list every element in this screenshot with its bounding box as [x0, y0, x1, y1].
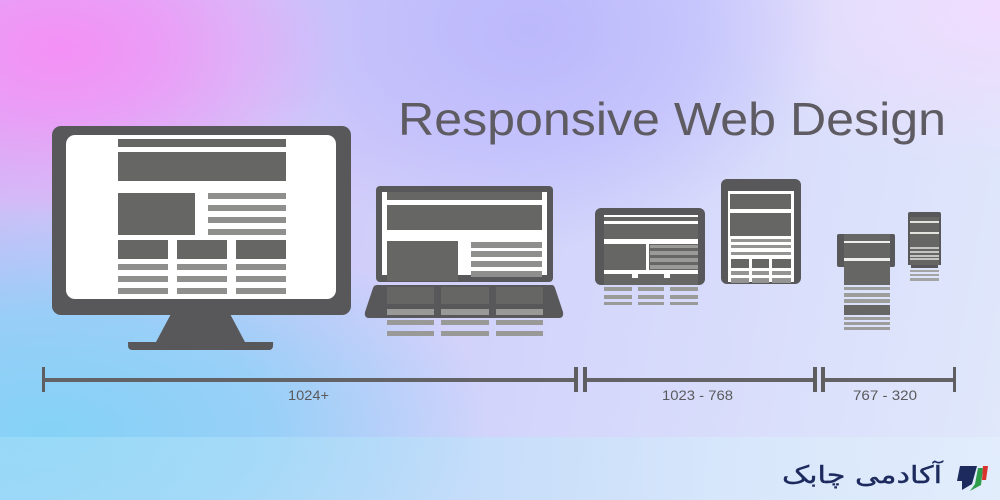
- icon: tablet portrait: [721, 179, 801, 284]
- icon: tablet landscape: [595, 208, 705, 305]
- scale: 1023 - 768: 1023 - 768: [662, 387, 733, 403]
- icon: laptop: [365, 186, 563, 336]
- title: Responsive Web Design: [398, 93, 946, 145]
- scale: 767 - 320: [821, 367, 956, 403]
- logo: academy wordmark: [782, 460, 988, 491]
- icon: desktop monitor: [52, 126, 351, 350]
- scale: 1024+: [42, 367, 578, 403]
- scale: 1024+: 1024+: [288, 387, 329, 403]
- scale: 1023 - 768: [583, 367, 817, 403]
- icon: phone landscape: [837, 234, 895, 330]
- scale: 767 - 320: 767 - 320: [853, 387, 917, 403]
- logo: academy wordmark: آکادمی چابک: [782, 460, 944, 489]
- icon: phone portrait: [908, 212, 941, 281]
